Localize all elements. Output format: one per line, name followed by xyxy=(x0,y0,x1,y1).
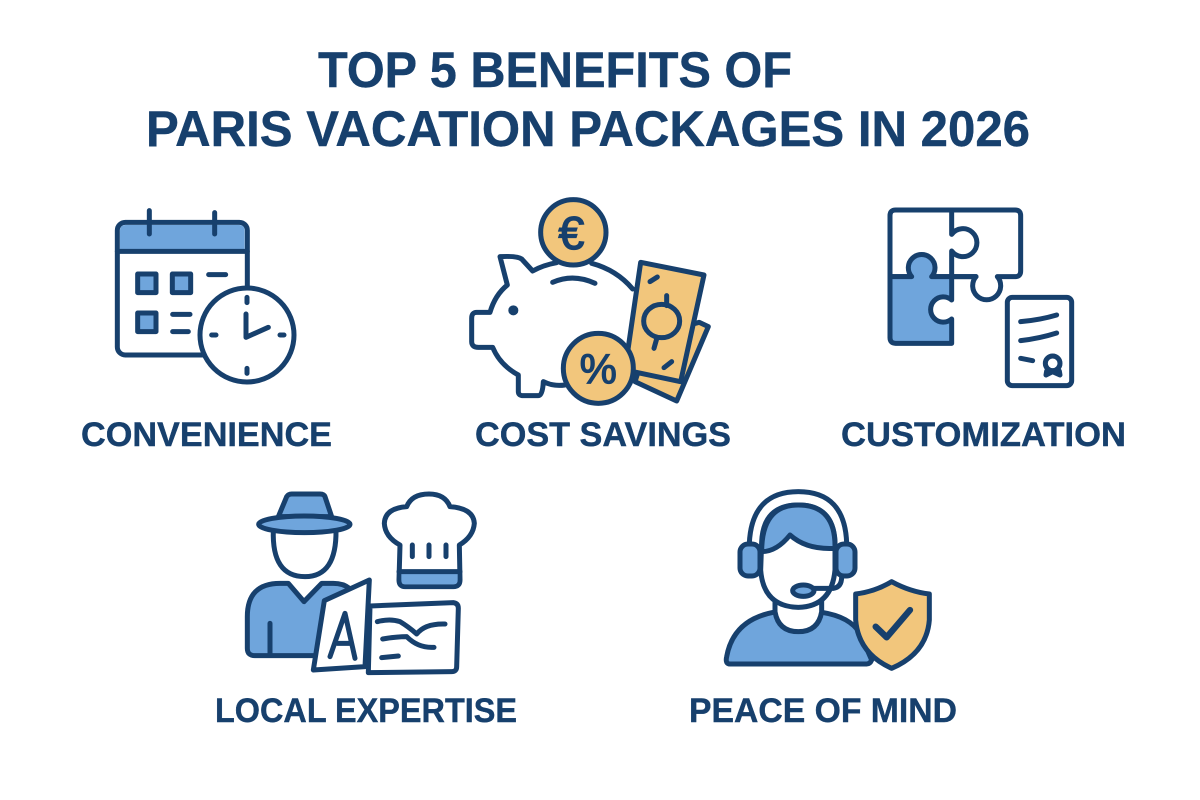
title: TOP 5 BENEFITS OF xyxy=(318,42,792,98)
label: peace of mind: PEACE OF MIND xyxy=(689,692,957,730)
title: PARIS VACATION PACKAGES IN 2026 xyxy=(146,101,1030,157)
label: cost savings: COST SAVINGS xyxy=(475,416,731,454)
euro symbol: € xyxy=(558,207,584,259)
title xyxy=(146,42,1030,157)
panel: local expertise xyxy=(215,494,517,730)
panel: convenience xyxy=(81,211,332,454)
icon: piggy bank with coins and banknotes xyxy=(472,200,708,403)
panel: customization xyxy=(841,210,1126,454)
icon: guide, chef hat and menu xyxy=(247,494,474,673)
label: customization: CUSTOMIZATION xyxy=(841,416,1126,454)
panel: cost savings xyxy=(472,200,731,454)
label: convenience: CONVENIENCE xyxy=(81,416,332,454)
icon: calendar and clock xyxy=(117,211,294,382)
icon: support agent with shield xyxy=(726,492,929,668)
icon: puzzle and certificate xyxy=(890,210,1072,386)
percent symbol: % xyxy=(580,345,617,392)
label: local expertise: LOCAL EXPERTISE xyxy=(215,692,517,730)
panel: peace of mind xyxy=(689,492,957,730)
